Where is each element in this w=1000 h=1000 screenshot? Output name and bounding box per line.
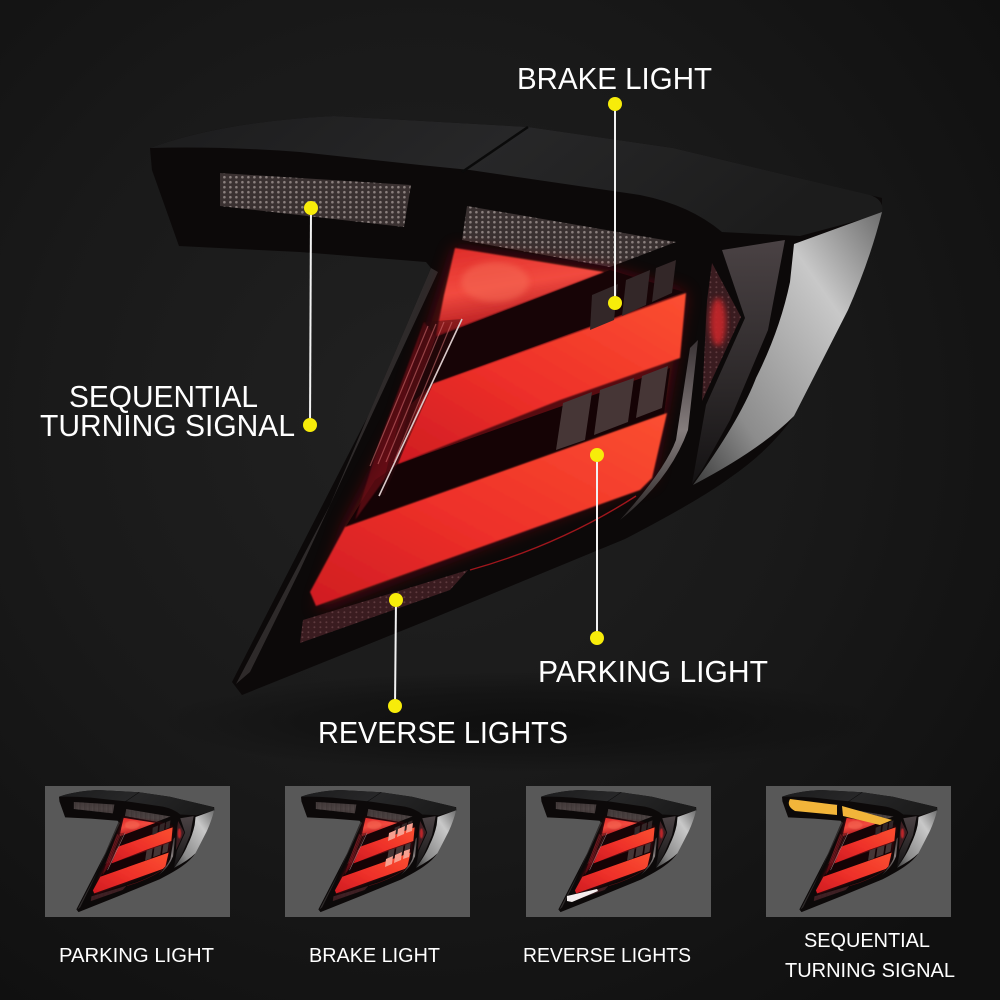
panel: brake light mode xyxy=(285,786,470,967)
housing body xyxy=(150,116,882,695)
end dot xyxy=(590,631,604,645)
lit amber left segment xyxy=(789,799,837,815)
panel: parking light mode xyxy=(45,786,230,967)
label: BRAKE LIGHT xyxy=(517,61,712,96)
lit amber right segment xyxy=(842,806,892,825)
lower parking blocks xyxy=(556,366,668,450)
end dot xyxy=(388,699,402,713)
left turn signal lens xyxy=(220,173,411,227)
caption: BRAKE LIGHT xyxy=(309,945,440,967)
leader line xyxy=(310,208,311,425)
cap seam xyxy=(462,127,528,172)
callout: sequential turning signal xyxy=(40,201,318,443)
callout: parking light xyxy=(538,448,768,689)
main tail light assembly xyxy=(150,116,882,695)
label: REVERSE LIGHTS xyxy=(318,715,568,750)
start dot xyxy=(389,593,403,607)
top cap surface xyxy=(150,116,882,236)
lit reverse light xyxy=(567,889,598,902)
lit brake blocks upper xyxy=(388,823,413,841)
end dot xyxy=(303,418,317,432)
start dot xyxy=(608,97,622,111)
caption: TURNING SIGNAL xyxy=(785,960,955,982)
side outer white panel xyxy=(693,212,882,485)
end dot xyxy=(608,296,622,310)
lower red light bar xyxy=(310,413,667,606)
start dot xyxy=(590,448,604,462)
upper light highlight xyxy=(461,262,529,302)
leader line xyxy=(614,104,616,303)
thumbnail lamp xyxy=(59,790,214,912)
floor shadow xyxy=(160,672,880,772)
right turn signal lens xyxy=(462,206,676,267)
label: TURNING SIGNAL xyxy=(40,408,295,443)
callout: reverse lights xyxy=(318,593,568,750)
lit brake blocks lower xyxy=(385,849,410,867)
upper red light xyxy=(436,248,604,336)
red glow xyxy=(316,248,686,610)
upper parking blocks xyxy=(590,260,676,330)
caption: PARKING LIGHT xyxy=(59,945,214,967)
inner trim reflection xyxy=(620,340,698,520)
thumbnail background xyxy=(45,786,230,917)
glass strip xyxy=(370,319,462,496)
label: PARKING LIGHT xyxy=(538,654,768,689)
thumbnail lamp xyxy=(541,790,696,912)
side red lamp xyxy=(702,263,741,401)
callout: brake light xyxy=(517,61,712,310)
thin red contour xyxy=(470,496,636,570)
red dim area under glass xyxy=(355,322,436,520)
dark band upper xyxy=(410,270,684,405)
thumbnail background xyxy=(285,786,470,917)
thumbnail lamp xyxy=(301,790,456,912)
caption: SEQUENTIAL xyxy=(804,930,930,952)
thumbnail lamp xyxy=(782,790,937,912)
dark band lower xyxy=(345,368,670,528)
start dot xyxy=(304,201,318,215)
thumbnail background xyxy=(766,786,951,917)
middle red light bar xyxy=(398,293,686,464)
caption: REVERSE LIGHTS xyxy=(523,945,691,967)
edge reflection xyxy=(236,268,438,684)
thumbnail background xyxy=(526,786,711,917)
side window xyxy=(692,240,785,484)
side lamp highlight xyxy=(710,298,726,346)
leader line xyxy=(395,600,396,706)
label: SEQUENTIAL xyxy=(69,379,258,414)
reverse light lens xyxy=(300,570,468,643)
leader line xyxy=(596,455,598,638)
panel: sequential turning signal mode xyxy=(766,786,955,982)
panel: reverse lights mode xyxy=(523,786,711,967)
